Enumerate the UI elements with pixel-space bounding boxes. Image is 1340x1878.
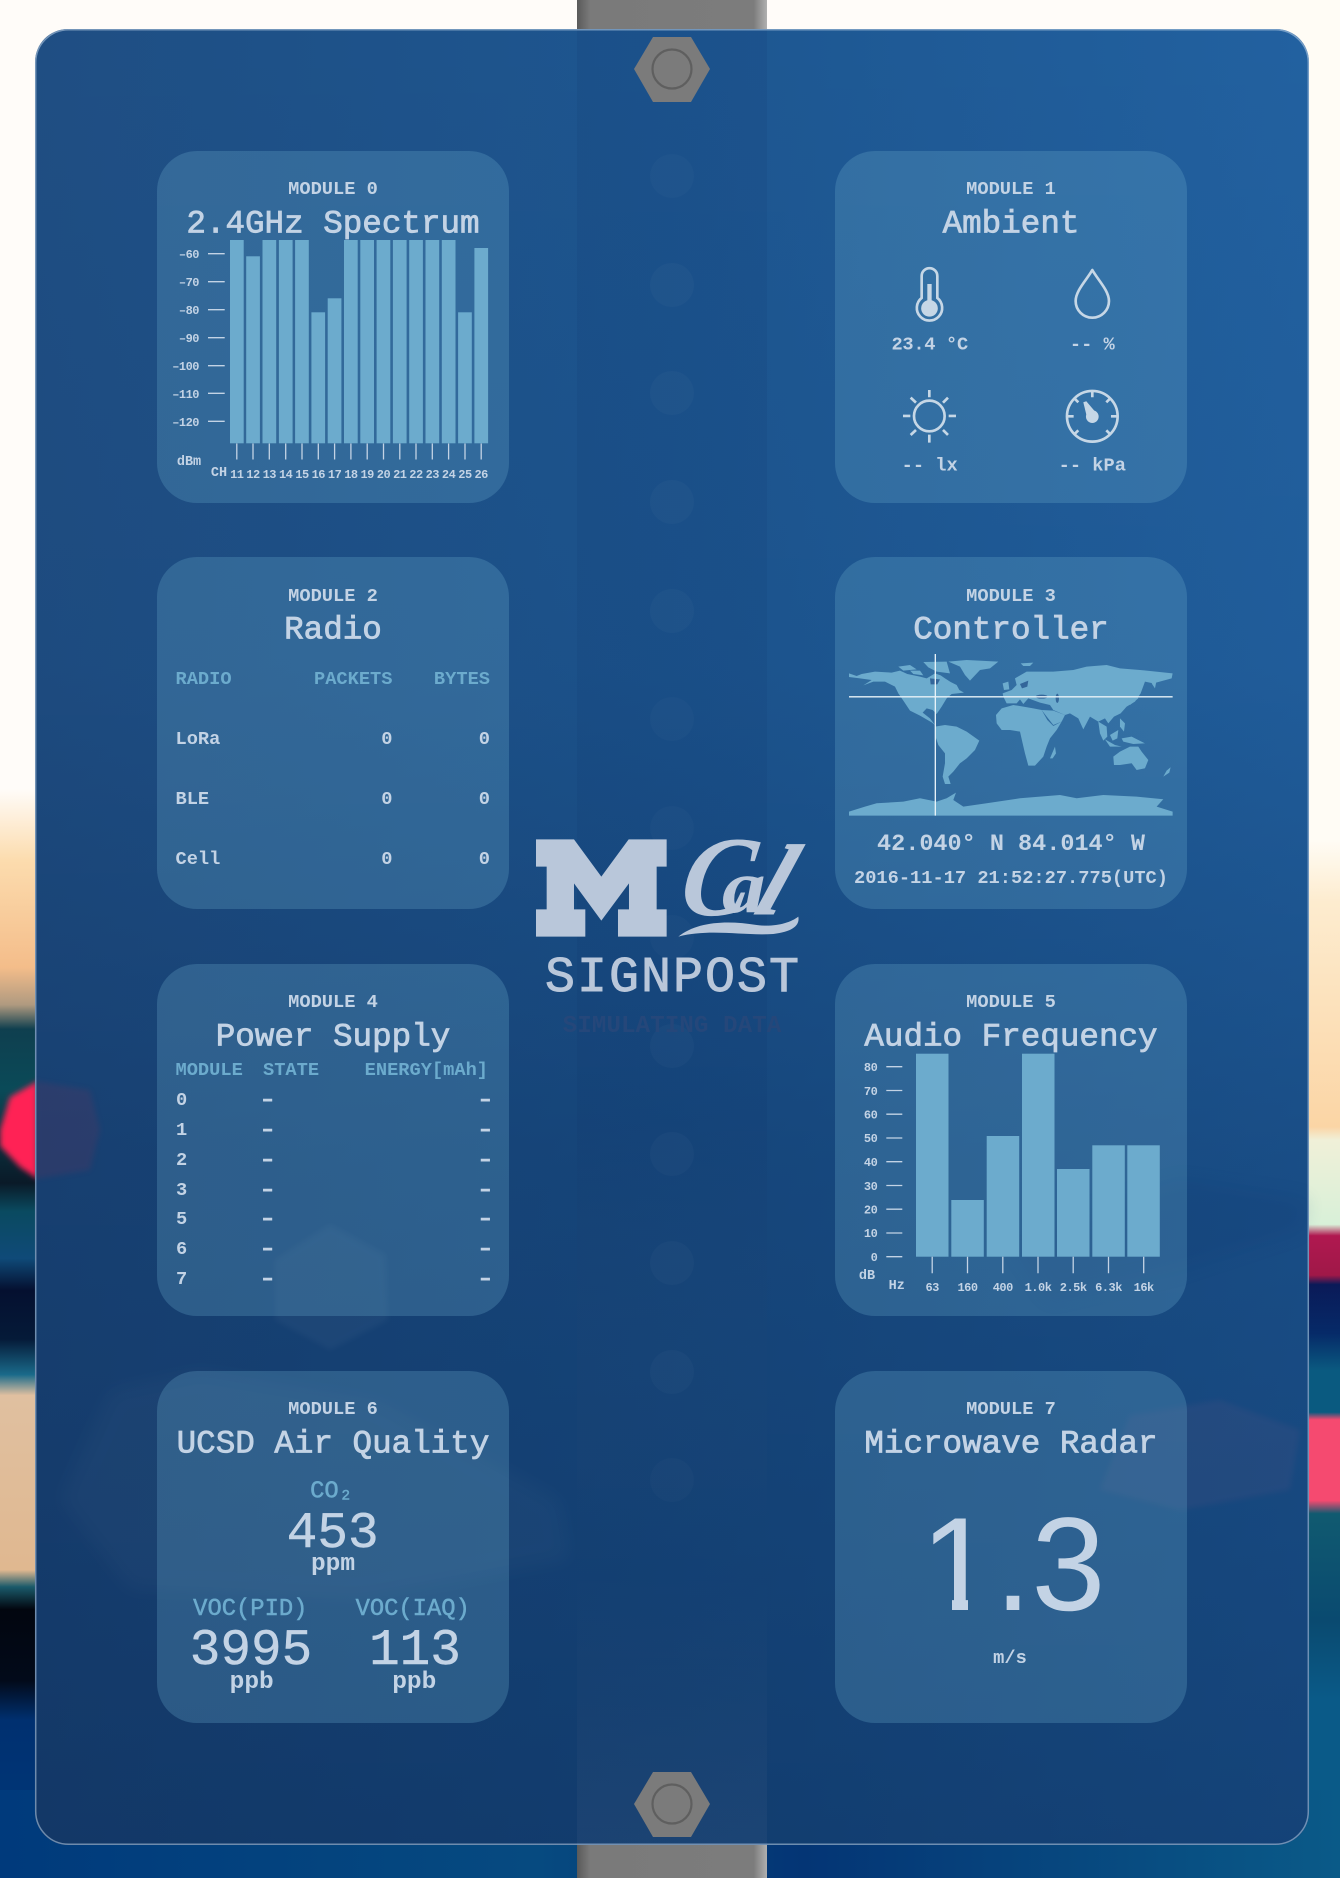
table: power: – <box>480 1149 491 1171</box>
table: power: 5 <box>176 1208 187 1230</box>
module label 1: MODULE 1 <box>966 178 1056 200</box>
title: audio frequency: Audio Frequency <box>864 1018 1158 1056</box>
bar chart: audio: 40 <box>864 1156 878 1170</box>
table: radio: PACKETS <box>314 668 392 690</box>
reading: pressure: -- kPa <box>1059 454 1126 476</box>
module label 6: MODULE 6 <box>288 1398 378 1420</box>
reading: VOC PID: 3995 <box>190 1623 312 1680</box>
panel: module 1 ambient <box>835 151 1187 503</box>
title: ambient: Ambient <box>943 206 1079 242</box>
bar chart: spectrum: 16 <box>312 468 325 482</box>
bar chart: audio: 400 <box>993 1281 1013 1295</box>
module label 2: MODULE 2 <box>288 585 378 607</box>
bar chart: spectrum: 22 <box>409 468 423 482</box>
title: power supply: Power Supply <box>216 1018 450 1056</box>
simulating data notice: SIMULATING DATA <box>563 1013 782 1040</box>
coordinates: 42.040° N 84.014° W <box>877 831 1146 858</box>
title: spectrum: 2.4GHz Spectrum <box>186 206 480 242</box>
table: radio: 0 <box>381 788 392 810</box>
icon: pressure gauge <box>1067 391 1118 442</box>
bar chart: audio: 50 <box>864 1132 878 1146</box>
big reading: speed: 1.3 <box>921 1491 1105 1639</box>
table: power: – <box>262 1149 273 1171</box>
bar chart: audio: 70 <box>864 1085 878 1099</box>
logo: Cal script: C <box>673 814 766 940</box>
table: radio: Cell <box>176 848 220 870</box>
bar chart: audio <box>859 1054 1160 1295</box>
table: power: – <box>262 1208 273 1230</box>
bar chart: spectrum: –70 <box>179 276 199 290</box>
table: power: – <box>480 1208 491 1230</box>
panel: module 4 power supply <box>157 964 509 1316</box>
table: power: – <box>480 1089 491 1111</box>
bar chart: audio: 160 <box>957 1281 978 1295</box>
bottom bolt <box>634 1772 710 1837</box>
panel: module 3 controller <box>835 557 1187 909</box>
module label 0: MODULE 0 <box>288 178 378 200</box>
reading: CO2: 453 <box>287 1506 379 1563</box>
reading: VOC IAQ: 113 <box>369 1623 461 1680</box>
title: controller: Controller <box>913 612 1109 648</box>
bar chart: spectrum: –120 <box>172 416 199 430</box>
table: radio: 0 <box>381 728 392 750</box>
table: power: 0 <box>176 1089 187 1111</box>
bar chart: audio: 0 <box>871 1251 878 1265</box>
bar chart: audio: 2.5k <box>1060 1281 1087 1295</box>
reading: VOC IAQ: VOC(IAQ) <box>356 1596 470 1623</box>
module label 7: MODULE 7 <box>966 1398 1056 1420</box>
table: power: – <box>262 1089 273 1111</box>
module label 3: MODULE 3 <box>966 585 1056 607</box>
table: radio: 0 <box>479 788 490 810</box>
reading: VOC PID: VOC(PID) <box>193 1596 307 1623</box>
table: radio: BLE <box>176 788 209 810</box>
table: power: – <box>480 1238 491 1260</box>
table: power: – <box>262 1238 273 1260</box>
reading: CO2 <box>287 1478 379 1578</box>
table: radio: LoRa <box>176 728 220 750</box>
bar chart: spectrum: 11 <box>230 468 244 482</box>
table: power: 6 <box>176 1238 187 1260</box>
bar chart: spectrum: 26 <box>474 468 488 482</box>
bar chart: spectrum: –100 <box>172 360 199 374</box>
world map <box>849 654 1173 816</box>
bar chart: spectrum: 13 <box>263 468 276 482</box>
panel: module 6 air quality <box>157 1371 509 1723</box>
module label 4: MODULE 4 <box>288 991 378 1013</box>
bar chart: spectrum: CH <box>211 466 227 481</box>
bar chart: spectrum: 23 <box>426 468 439 482</box>
panel: module 7 microwave radar <box>835 1371 1187 1723</box>
panel: module 5 audio frequency <box>835 964 1187 1316</box>
timestamp: 2016-11-17 21:52:27.775(UTC) <box>854 867 1168 889</box>
reading: VOC IAQ <box>356 1596 470 1696</box>
table: power: – <box>262 1179 273 1201</box>
bar chart: spectrum: –90 <box>179 332 199 346</box>
reading: VOC PID <box>190 1596 312 1696</box>
bar chart: audio: 16k <box>1134 1281 1154 1295</box>
table: radio <box>176 668 490 870</box>
reading: CO2: ppm <box>311 1551 355 1578</box>
logo: Cal script <box>673 814 812 940</box>
table: power: – <box>262 1268 273 1290</box>
table: power: MODULE <box>176 1059 243 1081</box>
icon: sun <box>903 390 956 443</box>
panel: module 0 spectrum <box>157 151 509 503</box>
bar chart: spectrum: 25 <box>458 468 472 482</box>
logo: Cal script: l <box>744 826 812 936</box>
reading: VOC IAQ: ppb <box>392 1669 436 1696</box>
table: radio: BYTES <box>434 668 490 690</box>
bar chart: spectrum: 21 <box>393 468 407 482</box>
unit: m/s: m/s <box>993 1647 1027 1669</box>
logo: SIGNPOST wordmark: SIGNPOST <box>545 950 801 1007</box>
bar chart: spectrum: 24 <box>442 468 456 482</box>
table: power: – <box>262 1119 273 1141</box>
bar chart: spectrum: 17 <box>328 468 342 482</box>
reading: VOC PID: ppb <box>230 1669 274 1696</box>
bar chart: spectrum: 19 <box>360 468 374 482</box>
title: air quality: UCSD Air Quality <box>177 1426 489 1462</box>
bar chart: audio: 30 <box>864 1180 878 1194</box>
bar chart: spectrum: 18 <box>344 468 358 482</box>
icon: thermometer <box>917 268 942 321</box>
bar chart: audio: 6.3k <box>1095 1281 1122 1295</box>
table: radio: RADIO <box>176 668 232 690</box>
bar chart: spectrum: 15 <box>295 468 309 482</box>
panel: module 2 radio <box>157 557 509 909</box>
logo: Michigan block M <box>536 839 667 937</box>
bar chart: audio: 63 <box>925 1281 939 1295</box>
bar chart: audio: 60 <box>864 1108 878 1122</box>
table: power: ENERGY[mAh] <box>365 1059 488 1081</box>
table: power: – <box>480 1119 491 1141</box>
bar chart: spectrum: –110 <box>172 388 199 402</box>
bar chart: audio: Hz <box>889 1279 905 1294</box>
bar chart: spectrum: dBm <box>177 455 201 470</box>
table: power: 1 <box>176 1119 187 1141</box>
bar chart: spectrum: 12 <box>246 468 260 482</box>
table: power: – <box>480 1179 491 1201</box>
reading: light: -- lx <box>902 454 958 476</box>
bar chart: audio: 1.0k <box>1025 1281 1052 1295</box>
table: power: 2 <box>176 1149 187 1171</box>
signpost pole top <box>577 0 767 30</box>
table: power: 3 <box>176 1179 187 1201</box>
table: power <box>176 1059 491 1290</box>
bar chart: spectrum: 20 <box>377 468 390 482</box>
bar chart: spectrum: –80 <box>179 304 199 318</box>
bar chart: spectrum: 14 <box>279 468 293 482</box>
icon: water drop <box>1076 270 1109 318</box>
table: radio: 0 <box>381 848 392 870</box>
table: power: STATE <box>263 1059 319 1081</box>
title: microwave radar: Microwave Radar <box>864 1426 1158 1462</box>
table: power: 7 <box>176 1268 187 1290</box>
top bolt <box>634 37 710 102</box>
bar chart: audio: 10 <box>864 1227 878 1241</box>
reading: CO2: CO₂ <box>310 1478 353 1506</box>
signpost pole bottom <box>577 1840 767 1878</box>
module label 5: MODULE 5 <box>966 991 1056 1013</box>
bar chart: audio: 80 <box>864 1061 878 1075</box>
table: radio: 0 <box>479 728 490 750</box>
bar chart: spectrum: –60 <box>179 248 199 262</box>
bar chart: spectrum <box>172 240 488 482</box>
title: radio: Radio <box>284 612 382 648</box>
logo: Cal script: a <box>722 844 766 929</box>
reading: temperature: 23.4 °C <box>891 334 968 356</box>
bar chart: audio: dB <box>859 1269 875 1284</box>
table: power: – <box>480 1268 491 1290</box>
bar chart: audio: 20 <box>864 1204 878 1218</box>
table: radio: 0 <box>479 848 490 870</box>
reading: humidity: -- % <box>1070 334 1116 356</box>
